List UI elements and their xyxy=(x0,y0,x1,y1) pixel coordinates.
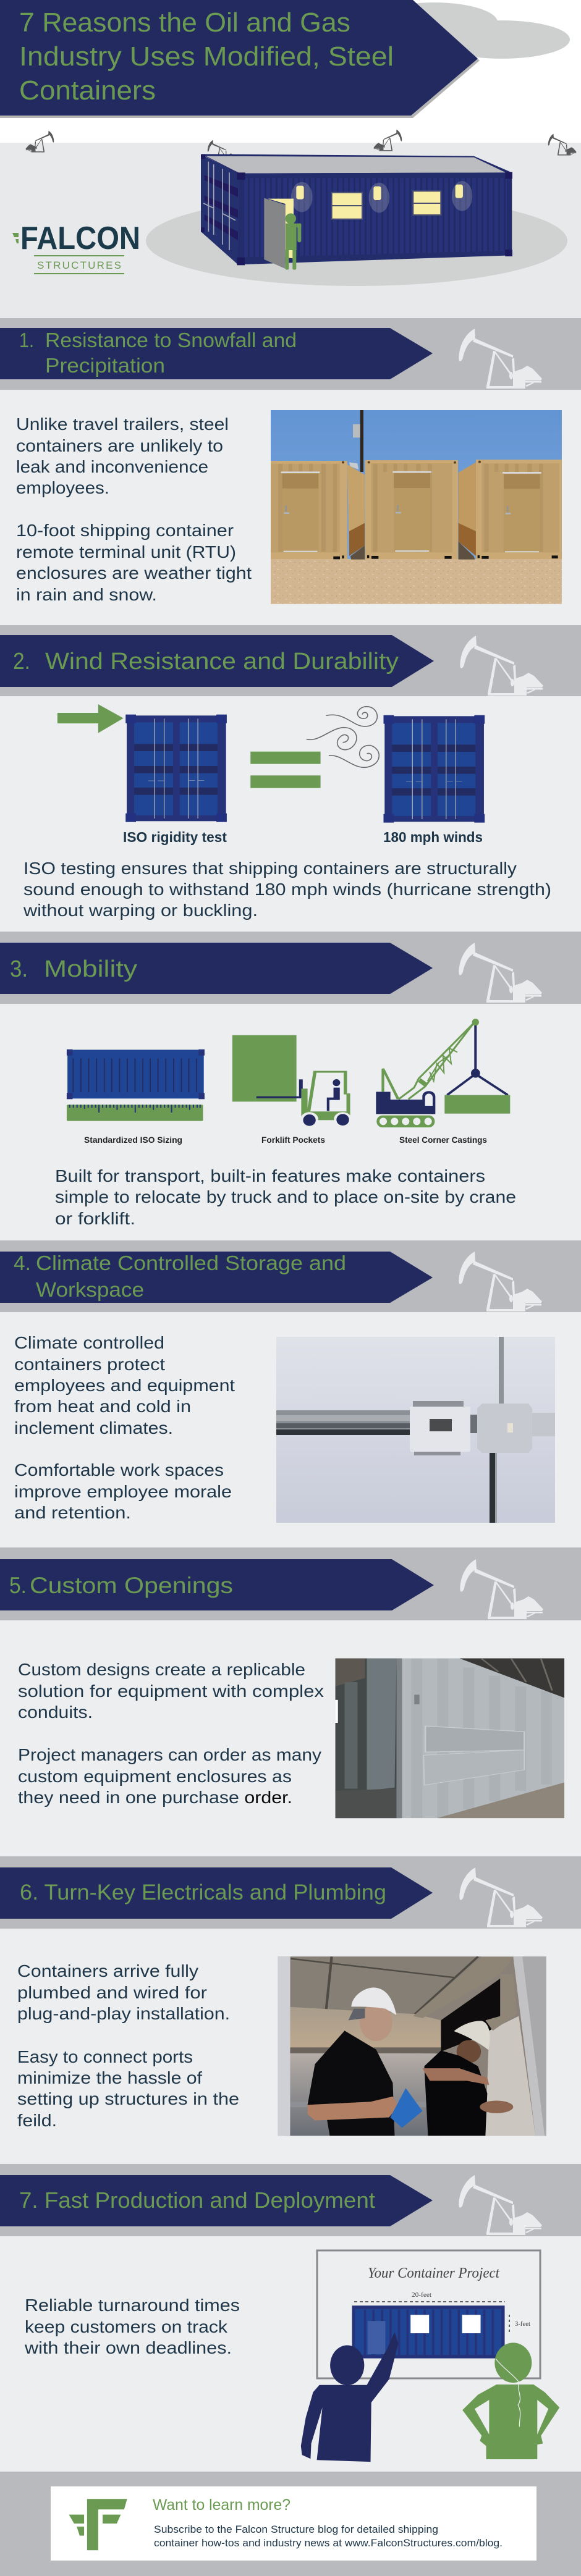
heading: Wind Resistance and Durability xyxy=(45,649,399,675)
title: Containers xyxy=(19,75,156,106)
content background xyxy=(0,1312,581,1547)
illustrations: two people xyxy=(301,2332,559,2462)
call to action text xyxy=(154,2523,503,2549)
heading: 6. Turn-Key Electricals and Plumbing xyxy=(20,1880,386,1905)
body text: 10-foot shipping container xyxy=(16,521,234,540)
heading: 2. xyxy=(13,649,30,675)
body text: containers protect xyxy=(14,1355,165,1374)
person: woman with braid xyxy=(462,2342,559,2459)
panel: section 4 xyxy=(0,1240,581,1547)
body text: they need in one purchase order. xyxy=(18,1788,292,1807)
worker left xyxy=(308,1987,398,2136)
diagram: ISO test vs wind xyxy=(57,704,485,823)
heading: Custom Openings xyxy=(30,1573,233,1598)
icon: distant pump jacks xyxy=(25,130,577,162)
icon: pump jack xyxy=(459,943,542,1003)
icon labels: Standardized ISO Sizing xyxy=(84,1135,182,1145)
body text: custom equipment enclosures as xyxy=(18,1767,292,1786)
body text xyxy=(14,1333,235,1522)
header arrow xyxy=(0,2175,433,2226)
heading xyxy=(10,956,137,982)
arrow: rigidity force xyxy=(57,704,124,733)
body text: ISO testing ensures that shipping containers are structurally xyxy=(23,859,517,878)
header arrow xyxy=(0,635,434,687)
call to action text: container how-tos and industry news at www.FalconStructures.com/blog. xyxy=(154,2537,503,2549)
title banner xyxy=(0,0,480,118)
content background xyxy=(0,2236,581,2472)
icon: pump jack xyxy=(460,1559,543,1619)
call to action text: Subscribe to the Falcon Structure blog for detailed shipping xyxy=(154,2523,438,2535)
body text: Unlike travel trailers, steel xyxy=(16,415,229,434)
header band xyxy=(0,318,581,390)
body text: minimize the hassle of xyxy=(17,2068,202,2087)
panel: section 1 xyxy=(0,318,581,625)
icon labels xyxy=(84,1135,487,1145)
illustration: project whiteboard: 20-feet xyxy=(412,2291,431,2299)
photo: two workers in container xyxy=(278,1956,546,2136)
diagram labels: ISO rigidity test xyxy=(123,829,227,845)
body text: from heat and cold in xyxy=(14,1397,191,1416)
junction box xyxy=(477,1404,532,1453)
icon: wind swirls xyxy=(307,707,379,767)
body text xyxy=(24,2296,240,2357)
icon: person in doorway xyxy=(286,213,301,270)
body text xyxy=(16,415,252,604)
heading xyxy=(14,1252,346,1301)
heading: 5. xyxy=(9,1573,27,1598)
diagram labels: 180 mph winds xyxy=(383,829,483,845)
header band xyxy=(0,625,581,696)
panel: section 3 xyxy=(0,932,581,1240)
icon: container front right xyxy=(383,715,485,823)
photo: grey enclosure with custom opening xyxy=(336,1659,564,1818)
body text: Containers arrive fully xyxy=(17,1961,198,1980)
logo: Falcon Structures xyxy=(12,221,140,274)
body text: containers are unlikely to xyxy=(16,436,223,455)
heading: Precipitation xyxy=(45,354,165,377)
content background xyxy=(0,1004,581,1240)
body text: Project managers can order as many xyxy=(18,1745,321,1764)
heading: Resistance to Snowfall and xyxy=(45,329,297,351)
body text: setting up structures in the xyxy=(17,2089,239,2108)
header band xyxy=(0,1240,581,1312)
call to action card xyxy=(51,2486,536,2561)
header arrow xyxy=(0,1252,433,1303)
photo: tan RTU containers xyxy=(271,410,562,604)
icon: pump jack xyxy=(459,1252,542,1311)
content background xyxy=(0,696,581,932)
body text xyxy=(23,859,551,920)
panel: section 7 xyxy=(0,2164,581,2472)
icon: pump jack xyxy=(459,329,542,389)
logo: Falcon Structures: FALCON xyxy=(20,221,140,256)
call to action heading: Want to learn more? xyxy=(153,2496,290,2514)
header arrow xyxy=(0,1867,433,1919)
heading: Climate Controlled Storage and xyxy=(36,1252,346,1274)
panel: section 6 xyxy=(0,1856,581,2164)
body text: solution for equipment with complex xyxy=(18,1682,324,1701)
cloud behind title xyxy=(370,2,570,59)
panel: section 2 xyxy=(0,625,581,932)
body text: feild. xyxy=(17,2111,57,2130)
body text: keep customers on track xyxy=(25,2317,228,2336)
header band xyxy=(0,1547,581,1620)
icon: pump jack xyxy=(459,1867,543,1927)
worker right xyxy=(422,2021,513,2136)
body text: employees. xyxy=(16,478,109,497)
footer band xyxy=(0,2472,581,2576)
panel: hero xyxy=(0,0,581,318)
header arrow xyxy=(0,328,433,379)
tablet xyxy=(390,2088,422,2128)
body text: and retention. xyxy=(14,1503,131,1522)
body text: simple to relocate by truck and to place on-site by crane xyxy=(55,1187,516,1206)
icon: forklift xyxy=(232,1035,352,1126)
ground shadow ellipse xyxy=(146,196,567,286)
body text: Comfortable work spaces xyxy=(14,1460,224,1480)
content background xyxy=(0,1620,581,1856)
illustration: project whiteboard: Your Container Project xyxy=(368,2265,500,2281)
icon: pump jack xyxy=(459,2175,542,2235)
logo: Falcon Structures: STRUCTURES xyxy=(37,259,121,271)
header band xyxy=(0,932,581,1004)
body text: without warping or buckling. xyxy=(23,901,258,920)
heading: Mobility xyxy=(44,956,137,982)
drawing of container xyxy=(352,2305,505,2359)
body text: plug-and-play installation. xyxy=(17,2004,230,2023)
hero ground panel xyxy=(0,143,581,318)
panel: section 5 xyxy=(0,1547,581,1856)
icons: mobility features xyxy=(67,1019,510,1127)
illustration: office container xyxy=(201,154,512,270)
icon: ISO container with ruler xyxy=(67,1050,205,1121)
body text: sound enough to withstand 180 mph winds (hurricane strength) xyxy=(23,880,551,899)
body text: in rain and snow. xyxy=(16,585,157,604)
logo: F mark xyxy=(69,2499,127,2550)
body text: plumbed and wired for xyxy=(17,1983,207,2002)
body text xyxy=(55,1166,516,1228)
person: man pointing xyxy=(301,2332,398,2462)
body text: remote terminal unit (RTU) xyxy=(16,542,236,562)
icon: container front left xyxy=(125,715,227,822)
body text: improve employee morale xyxy=(14,1482,232,1501)
body text: inclement climates. xyxy=(14,1418,173,1437)
heading: 4. xyxy=(14,1252,31,1274)
header band xyxy=(0,2164,581,2236)
header arrow xyxy=(0,943,433,994)
body text: enclosures are weather tight xyxy=(16,563,252,583)
body text xyxy=(18,1660,324,1807)
content background xyxy=(0,1929,581,2164)
body text: with their own deadlines. xyxy=(24,2338,232,2357)
body text: conduits. xyxy=(18,1703,93,1722)
header arrow xyxy=(0,1559,434,1610)
heading xyxy=(19,329,297,377)
body text: Custom designs create a replicable xyxy=(18,1660,305,1679)
body text: Easy to connect ports xyxy=(17,2047,193,2066)
title: Industry Uses Modified, Steel xyxy=(19,41,394,72)
icon: pump jack xyxy=(460,636,543,696)
title: 7 Reasons the Oil and Gas xyxy=(19,7,350,38)
body text xyxy=(17,1961,239,2130)
content background xyxy=(0,390,581,625)
thermostat xyxy=(410,1401,470,1455)
body text: Reliable turnaround times xyxy=(25,2296,240,2315)
body text: Climate controlled xyxy=(14,1333,164,1352)
body text: employees and equipment xyxy=(14,1376,235,1395)
heading: Workspace xyxy=(36,1278,144,1301)
illustration: project whiteboard xyxy=(317,2250,540,2378)
header band xyxy=(0,1856,581,1929)
body text: or forklift. xyxy=(55,1209,135,1228)
body text: Built for transport, built-in features make containers xyxy=(55,1166,485,1185)
heading: 1. xyxy=(19,329,34,351)
icon labels: Forklift Pockets xyxy=(261,1135,325,1145)
conduit rail xyxy=(276,1410,412,1435)
body text: leak and inconvenience xyxy=(16,457,208,476)
icon labels: Steel Corner Castings xyxy=(399,1135,487,1145)
illustration: project whiteboard: 3-feet xyxy=(515,2320,530,2328)
heading: 3. xyxy=(10,956,28,982)
heading: 7. Fast Production and Deployment xyxy=(19,2187,375,2213)
icon: crane xyxy=(376,1019,510,1127)
title xyxy=(19,7,394,106)
diagram labels xyxy=(123,829,483,845)
photo: thermostat on wall xyxy=(276,1337,555,1523)
icon: equals sign xyxy=(250,752,321,788)
